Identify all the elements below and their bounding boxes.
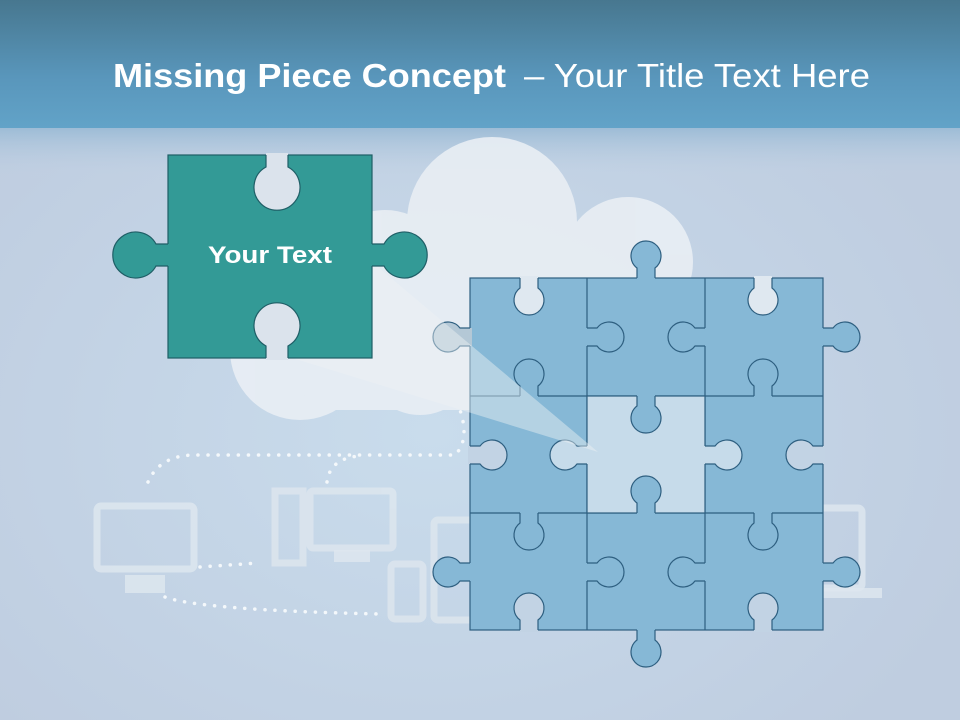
piece label: Your Text bbox=[208, 242, 332, 269]
holes bbox=[514, 276, 778, 315]
cloud bbox=[230, 137, 693, 420]
puzzle grid bbox=[433, 241, 860, 667]
title: – Your Title Text Here bbox=[524, 57, 870, 94]
dotted network lines bbox=[148, 410, 740, 614]
spotlight beam bbox=[250, 262, 598, 452]
teal piece bbox=[113, 153, 427, 360]
title bbox=[113, 57, 870, 94]
blue knobs bbox=[433, 241, 860, 667]
devices bbox=[97, 485, 862, 620]
faded knob bbox=[433, 322, 472, 352]
title: Missing Piece Concept bbox=[113, 57, 506, 94]
header band bbox=[0, 0, 960, 128]
